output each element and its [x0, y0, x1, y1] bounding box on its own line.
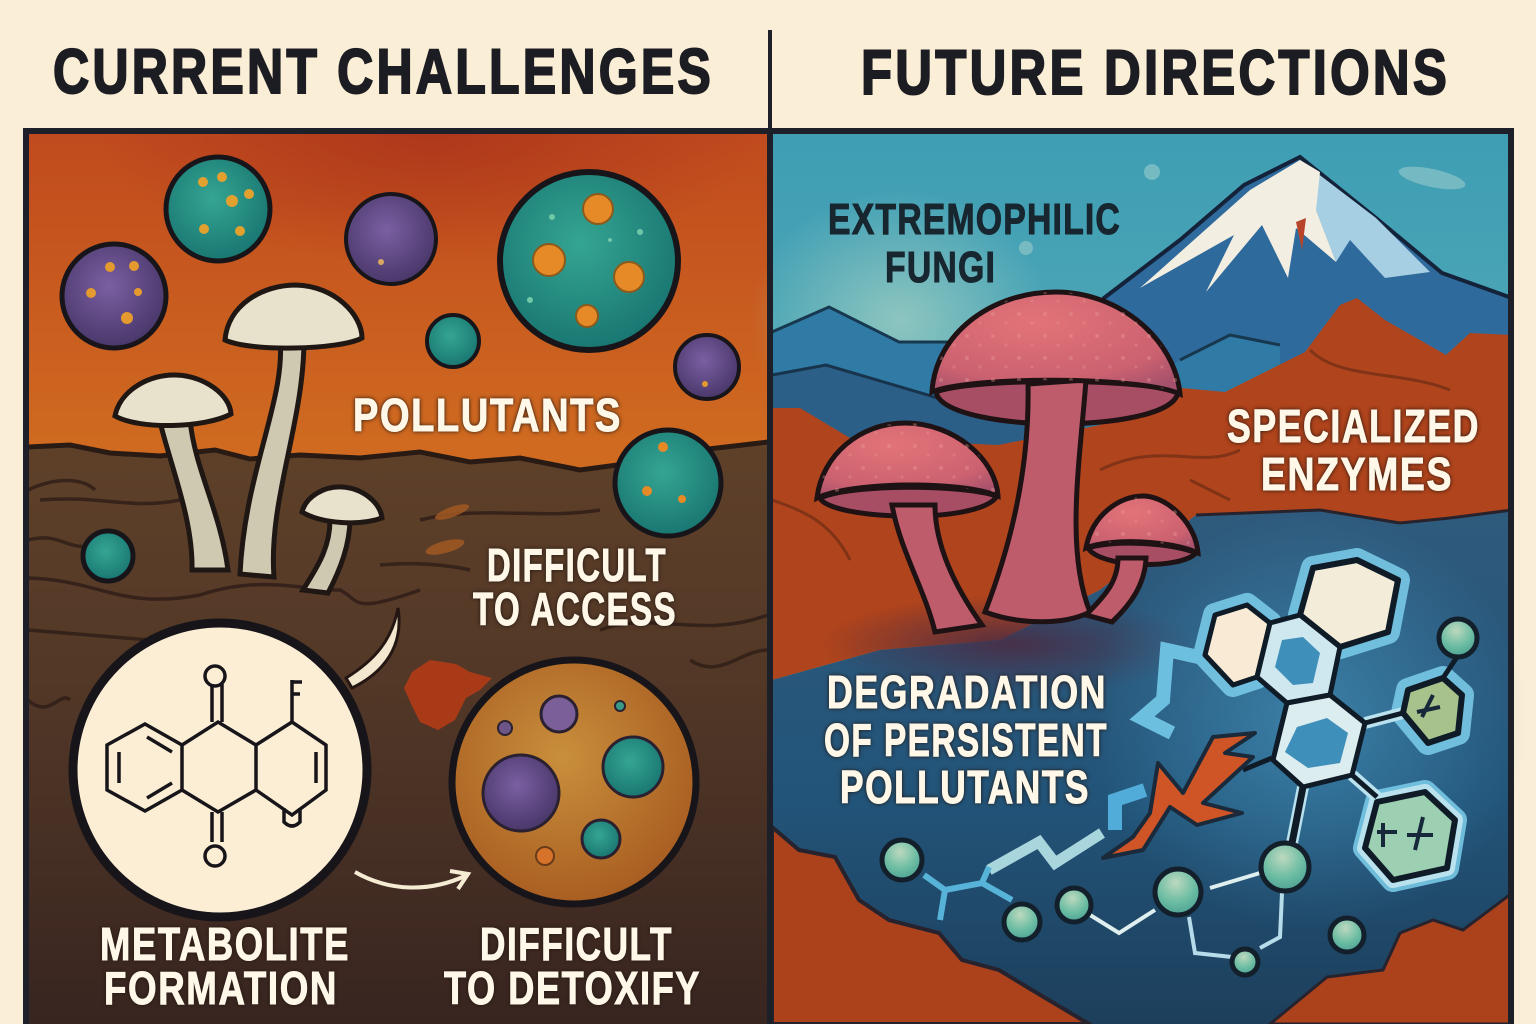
- panel: current challenges: [29, 134, 767, 1024]
- mushroom: large pink: [932, 292, 1180, 622]
- label: extremophilic fungi: FUNGI: [885, 243, 996, 292]
- label: metabolite formation: [100, 918, 350, 1014]
- pollutant: large teal sphere: [500, 172, 678, 350]
- clouds: [1019, 162, 1467, 255]
- label: difficult to access: [473, 539, 677, 635]
- distant blue hills: [772, 307, 1280, 500]
- rust clump: [404, 660, 492, 730]
- pollutant: small teal sphere: [427, 315, 479, 367]
- label: difficult to detoxify: [444, 918, 701, 1014]
- label: difficult to access: DIFFICULT: [487, 539, 667, 591]
- mushroom: medium white: [115, 375, 231, 570]
- plus marks: [1377, 695, 1440, 850]
- molecule glow: [1090, 510, 1530, 930]
- hexagon rings: [1205, 560, 1462, 880]
- curved arrow up to access: [346, 608, 399, 688]
- label: degradation of persistent pollutants: [824, 666, 1108, 813]
- hexagon inner fills: [1275, 637, 1348, 768]
- label: extremophilic fungi: [828, 195, 1121, 292]
- lightning trail: [1142, 650, 1203, 733]
- label: degradation of persistent pollutants: OF PERSISTENT: [824, 714, 1108, 766]
- bottom rocks: [772, 827, 1089, 1024]
- dusky soil shadow under mushrooms: [820, 595, 1200, 695]
- pollutant: top teal sphere: [166, 157, 270, 261]
- teal atoms: [882, 619, 1477, 975]
- orange soil flecks: [424, 501, 471, 558]
- mushroom: small pink: [1086, 496, 1198, 622]
- curved arrow to detoxify: [355, 871, 468, 889]
- label: difficult to detoxify: DIFFICULT: [480, 918, 673, 970]
- chain bonds: [1074, 873, 1282, 957]
- pollutant: left purple sphere: [62, 244, 166, 348]
- pollutant: right purple sphere: [675, 335, 739, 399]
- metabolite circle with molecule: [73, 623, 367, 917]
- label: specialized enzymes: ENZYMES: [1261, 448, 1453, 500]
- pollutant: lower left teal sphere: [83, 531, 133, 581]
- pollutant: lower right teal sphere: [615, 430, 721, 536]
- pollutant: center purple sphere: [346, 194, 436, 284]
- soil ground: [28, 442, 768, 1024]
- label: difficult to detoxify: TO DETOXIFY: [444, 962, 701, 1014]
- volcano mountain: [1104, 157, 1512, 460]
- toxic sphere: [452, 660, 696, 904]
- label: specialized enzymes: [1227, 400, 1480, 500]
- glow halo: [1205, 560, 1462, 880]
- label: pollutants: POLLUTANTS: [353, 389, 622, 441]
- label: difficult to access: TO ACCESS: [473, 583, 677, 635]
- label: metabolite formation: METABOLITE: [100, 918, 350, 970]
- panel: future directions: [750, 132, 1530, 1024]
- molecule bonds: [1243, 657, 1457, 843]
- heading: current challenges: CURRENT CHALLENGES: [53, 37, 714, 107]
- deep blue area: [772, 510, 1512, 1024]
- molecule: glowing structure: [882, 560, 1477, 975]
- mushroom: tall white: [225, 285, 362, 577]
- mushroom: medium pink: [817, 423, 998, 632]
- label: degradation of persistent pollutants: DEGRADATION: [827, 666, 1107, 718]
- reaction spark: [1103, 733, 1255, 858]
- label: extremophilic fungi: EXTREMOPHILIC: [828, 195, 1121, 244]
- mushroom: small white: [302, 487, 382, 593]
- label: degradation of persistent pollutants: POLLUTANTS: [840, 761, 1090, 813]
- red rocky terrain: [772, 298, 1512, 680]
- label: metabolite formation: FORMATION: [104, 962, 338, 1014]
